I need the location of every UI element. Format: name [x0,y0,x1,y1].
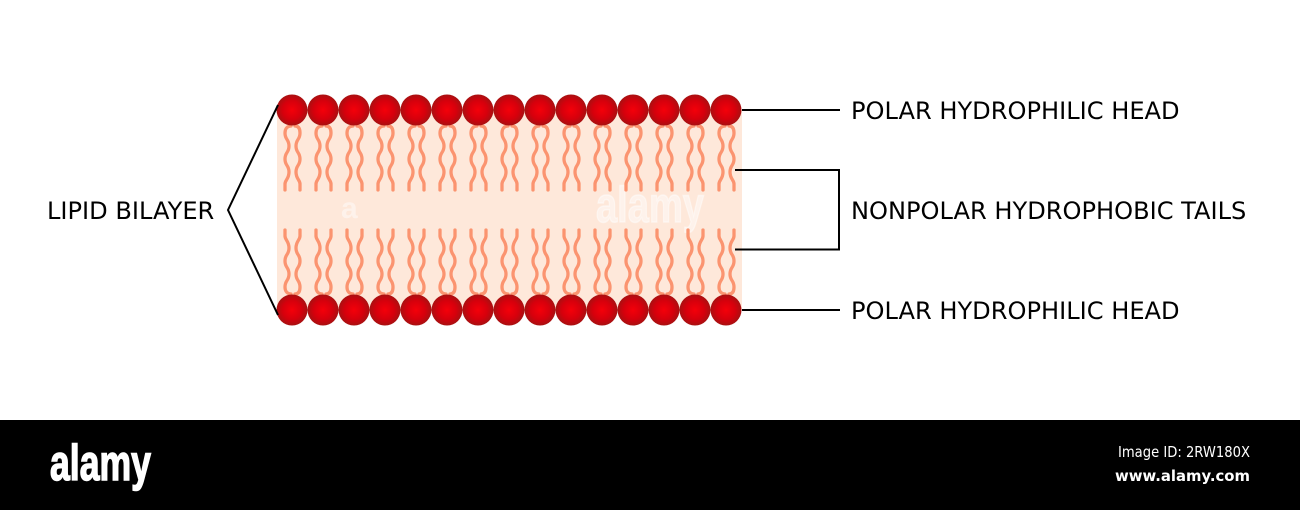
watermark: a [341,192,358,225]
watermark: alamy [596,177,704,233]
background band [277,110,742,310]
top head leader [742,109,840,111]
tails bracket [735,170,839,250]
label: tails: NONPOLAR HYDROPHOBIC TAILS [851,197,1246,225]
label: bottom head: POLAR HYDROPHILIC HEAD [851,297,1180,325]
label: top head: POLAR HYDROPHILIC HEAD [851,97,1180,125]
footer logo: alamy [50,435,151,491]
image id: Image ID: 2RW180X [1118,443,1250,461]
website: www.alamy.com [1115,467,1250,485]
label: lipid bilayer: LIPID BILAYER [47,197,215,225]
bottom head leader [742,309,840,311]
lipid molecules [276,94,742,326]
footer bar [0,420,1300,510]
watermark [341,177,704,233]
lipid bilayer bracket [228,105,278,315]
